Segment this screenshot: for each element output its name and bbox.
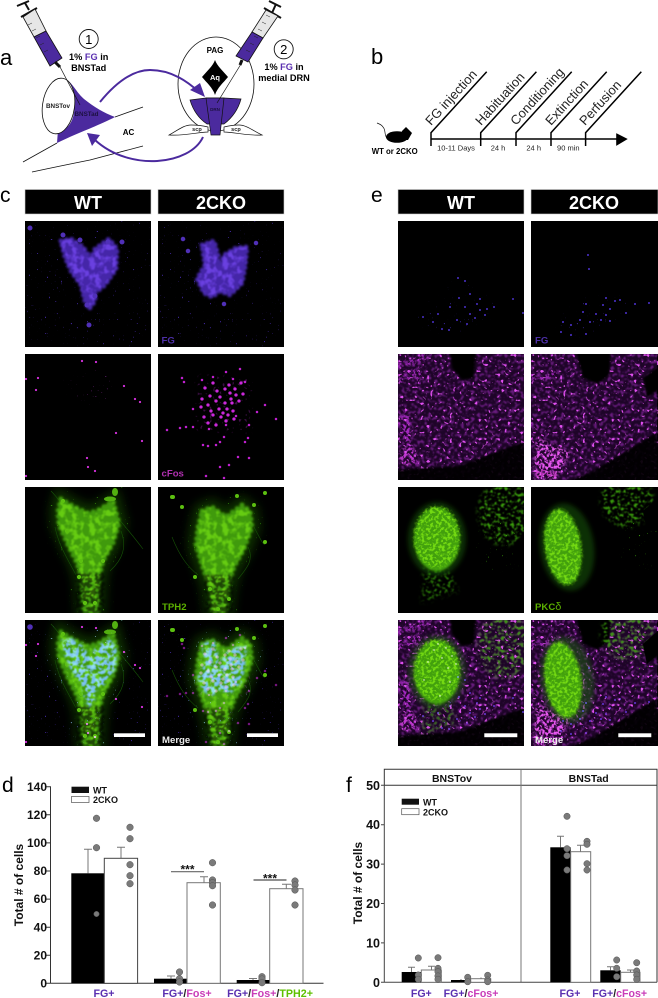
x labels [93,988,313,998]
image WT TPH2 [25,487,151,613]
event labels: Perfusion [576,77,624,128]
image 2CKO cFos [531,354,658,480]
frame and subregion headers [384,769,657,982]
interval labels: 90 min [557,144,580,152]
callout 2 [258,40,310,83]
y axis: 80 [34,864,47,878]
callout 1: 1 [85,32,92,47]
image 2CKO FG [531,221,658,347]
image 2CKO cFos: cFos [535,468,557,480]
y axis: 40 [34,920,47,934]
y axis: 140 [27,780,47,794]
significance markers: *** [263,872,277,886]
y axis: 0 [373,976,380,990]
PAG and DRN anatomy: scp [192,127,202,133]
event labels: Conditioning [507,65,567,128]
image 2CKO merge [531,620,658,746]
image WT FG [398,221,524,347]
data points [93,815,298,986]
event labels: FG injection [422,67,480,128]
legend: 2CKO [423,808,448,818]
image 2CKO merge: Merge [535,735,563,746]
y axis: 20 [34,948,47,962]
image WT merge [25,620,151,746]
syringe 2 [217,1,281,103]
BNST anatomy: AC [123,128,134,137]
label e: e [371,184,383,207]
BNST anatomy: BNSTov [46,103,71,110]
PAG and DRN anatomy: scp [231,127,241,133]
image WT FG [25,221,151,347]
image 2CKO FG: FG [162,336,175,346]
image 2CKO PKCd [531,487,658,613]
legend [402,798,448,818]
panel f: bar chart of BNST cell counts [346,769,657,998]
callout 1: 1% FG in [69,52,109,62]
bars [71,847,303,983]
legend: WT [423,798,437,808]
image 2CKO cFos: cFos [162,468,184,480]
y axis: 30 [366,858,380,872]
y axis: 100 [27,836,47,850]
image 2CKO FG [158,221,284,347]
PAG and DRN anatomy: DRN [210,107,220,112]
header WT: WT [447,193,475,213]
arrow: DRN projection to BNST [87,133,203,161]
legend [72,786,118,805]
header 2CKO [158,190,284,214]
image 2CKO TPH2: TPH2 [162,602,187,613]
header 2CKO: 2CKO [196,193,246,213]
callout 2: medial DRN [258,73,310,83]
interval labels [437,144,580,152]
header 2CKO [531,190,658,214]
significance markers [171,862,286,886]
bars [402,836,640,982]
y axis: 40 [366,818,380,832]
image WT merge [398,620,524,746]
interval labels: 10-11 Days [437,144,475,152]
callout 2: 1% FG in [264,62,304,72]
y axis: 10 [366,936,380,950]
image 2CKO TPH2 [158,487,284,613]
image WT cFos [398,354,524,480]
image 2CKO merge [158,620,284,746]
image 2CKO FG: FG [535,336,548,346]
interval labels: 24 h [491,144,505,152]
legend: WT [93,786,107,796]
y axis: 120 [27,808,47,822]
y axis [366,779,657,990]
label b: b [371,44,383,69]
arrow: BNST projection to DRN [100,70,205,102]
significance markers: *** [180,862,195,876]
BNST anatomy [23,76,143,172]
image WT cFos [25,354,151,480]
image WT PKCd [398,487,524,613]
event labels: Extinction [542,76,591,128]
data points [415,813,640,985]
frame and subregion headers: BNSTad [569,773,609,785]
panel c: DRN micrographs [0,184,285,746]
callout 2: 2 [280,42,287,57]
legend: 2CKO [93,795,118,805]
label c: c [0,184,10,207]
panel e: BNST micrographs [371,184,658,755]
mouse icon: WT or 2CKO [372,147,418,156]
panel b: timeline [371,44,641,156]
label d: d [2,774,14,797]
y axis [27,780,324,990]
BNST anatomy: BNSTad [74,111,99,118]
header WT [25,190,151,214]
PAG and DRN anatomy [169,37,262,135]
frame and subregion headers: BNSTov [432,773,472,785]
label a: a [0,45,13,70]
interval labels: 24 h [526,144,541,152]
image 2CKO merge: Merge [162,735,190,746]
x labels [411,988,647,998]
PAG and DRN anatomy: Aq [210,73,220,82]
y axis: 60 [34,892,47,906]
image 2CKO cFos [158,354,284,480]
PAG and DRN anatomy: PAG [207,46,223,55]
y axis title: Total # of cells [351,841,365,924]
y axis: 0 [40,976,47,990]
mouse icon [372,123,418,156]
y axis: 50 [366,779,380,793]
image 2CKO PKCd: PKCδ [535,601,561,613]
timeline axis [431,72,641,146]
header WT [398,190,524,214]
label f: f [346,774,352,797]
panel a: injection schematic [0,1,310,172]
header WT: WT [74,193,102,213]
header 2CKO: 2CKO [569,193,619,213]
event labels: Habituation [472,69,528,128]
callout 1: BNSTad [71,63,106,73]
panel d: bar chart of DRN cell counts [2,774,324,998]
syringe 1 [17,1,80,105]
y axis title: Total # of cells [12,843,26,926]
y axis: 20 [366,897,380,911]
callout 1 [69,30,109,73]
event labels [422,65,624,128]
